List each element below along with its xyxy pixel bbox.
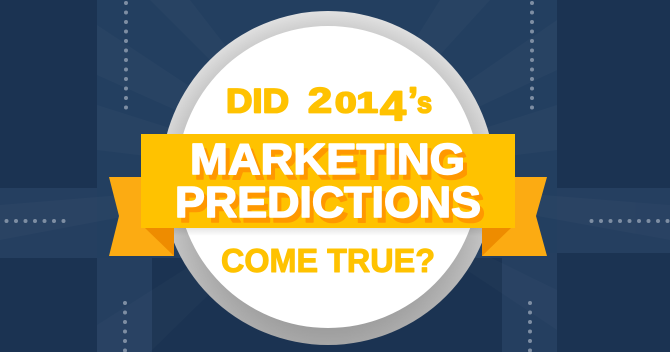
heading: did 2014's: DID [226, 82, 289, 120]
heading: did 2014's [226, 81, 432, 130]
heading: did 2014's: 01 [335, 88, 378, 120]
heading: did 2014's: 2 [308, 82, 332, 120]
dotted line: left [4, 219, 66, 223]
heading: did 2014's: ’ [408, 81, 418, 120]
dotted line: top right [530, 1, 534, 110]
heading: marketing predictions: MARKETING [194, 140, 469, 189]
ribbon tail: right [482, 177, 547, 256]
banner shadow [174, 228, 482, 236]
heading: marketing predictions: PREDICTIONS [175, 178, 481, 227]
ribbon tail: left [109, 177, 174, 256]
badge circle [161, 11, 495, 345]
heading: marketing predictions: PREDICTIONS [179, 183, 485, 232]
heading: did 2014's: 4 [380, 82, 407, 130]
dotted line: right [590, 219, 670, 223]
banner [141, 134, 515, 228]
heading: marketing predictions [175, 135, 485, 232]
heading: come true: COME TRUE? [221, 242, 435, 279]
dotted line: top left [124, 1, 128, 110]
heading: did 2014's: s [417, 86, 432, 120]
dotted line: bottom right [528, 301, 532, 352]
dotted line: bottom left [123, 301, 127, 352]
heading: marketing predictions: MARKETING [190, 135, 465, 184]
